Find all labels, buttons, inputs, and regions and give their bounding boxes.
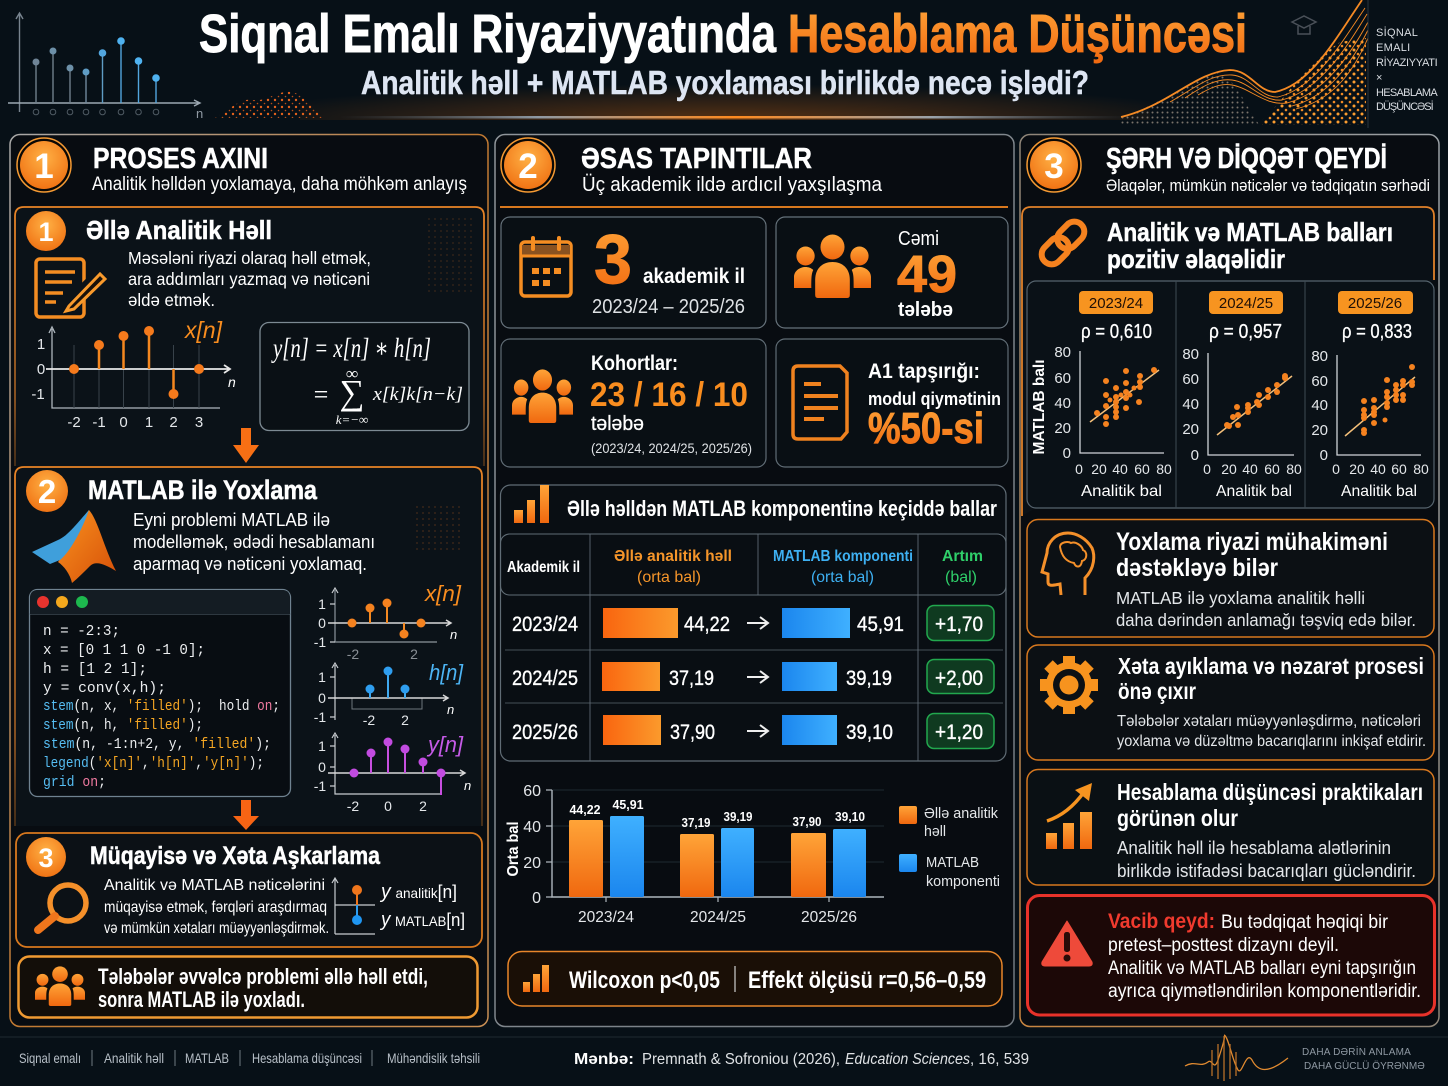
card heading: Yoxlama riyazi mühakiməni xyxy=(1116,528,1388,556)
chart: small h[n]: -2 xyxy=(363,712,375,728)
step 3 badge: 3 xyxy=(38,843,54,873)
header side label: SİQNAL xyxy=(1376,26,1418,39)
chart: small h[n]: -1 xyxy=(314,709,326,725)
chart: small y[n]: y[n] xyxy=(426,732,464,757)
scatter chart 2025/26: 80 xyxy=(1413,461,1429,477)
chart: x[n] stem plot xyxy=(31,317,236,431)
chart: small y[n]: 0 xyxy=(318,759,326,775)
cohort text: (2023/24, 2024/25, 2025/26) xyxy=(591,440,752,456)
chart: small y[n]: 1 xyxy=(318,738,326,754)
scatter chart 2023/24: 40 xyxy=(1054,395,1071,412)
step 2: MATLAB verification xyxy=(15,467,482,826)
chart: small y[n]: -1 xyxy=(314,778,326,794)
stat text: tələbə xyxy=(898,299,953,321)
stat text: Cəmi xyxy=(898,228,939,250)
code window xyxy=(30,590,290,796)
info card: debugging xyxy=(1027,645,1434,760)
scatter chart 2023/24 xyxy=(1054,291,1172,500)
panel 1 heading xyxy=(92,143,467,195)
formula box: convolution xyxy=(260,322,469,430)
footer tags: Analitik həll xyxy=(104,1050,164,1066)
statistics banner xyxy=(508,952,1002,1006)
formula box: convolution: ∑ xyxy=(340,373,364,412)
card body xyxy=(1116,588,1416,630)
chart: x[n] stem plot: 2 xyxy=(169,414,178,431)
chart: small y[n] xyxy=(314,732,471,814)
panel 1 number badge: 1 xyxy=(34,147,54,186)
callout text: Tələbələr əvvəlcə problemi əllə həll etdi, xyxy=(98,964,428,989)
icon: brain in head xyxy=(1042,533,1094,595)
formula box: convolution: y[n] = x[n] ∗ h[n] xyxy=(271,333,431,363)
scatter chart 2023/24: 0 xyxy=(1075,461,1083,477)
decorative stem plot xyxy=(8,13,203,121)
table row 2025/26 xyxy=(512,714,994,748)
scatter chart 2023/24: 80 xyxy=(1054,344,1071,361)
bar chart: mean scores: 2025/26 xyxy=(801,909,857,926)
decorative wave xyxy=(1121,0,1368,125)
table row 2025/26: 2025/26 xyxy=(512,721,578,744)
header side label xyxy=(1376,26,1438,113)
panel 2 heading xyxy=(581,143,883,196)
card heading xyxy=(1117,779,1423,831)
table row 2023/24 xyxy=(512,606,994,640)
panel 3 heading: ŞƏRH VƏ DİQQƏT QEYDİ xyxy=(1106,143,1387,175)
arrow: step 1 to step 2 xyxy=(233,428,259,463)
scatter chart 2023/24: 0 xyxy=(1063,445,1071,462)
panel 2 number badge: 2 xyxy=(518,147,538,186)
bar chart: mean scores: 0 xyxy=(532,890,541,907)
step 3 heading: Müqayisə və Xəta Aşkarlama xyxy=(90,842,381,870)
step 3: compare and detect errors xyxy=(16,833,482,947)
chart: small y[n]: -2 xyxy=(347,798,359,814)
scatter chart 2025/26: 40 xyxy=(1370,461,1386,477)
chart: small x[n]: 2 xyxy=(410,646,418,662)
table grid xyxy=(500,534,1006,761)
stat text: 49 xyxy=(897,246,957,304)
chart: x[n] stem plot: 1 xyxy=(145,414,153,431)
cohort text: tələbə xyxy=(591,413,644,435)
scatter chart 2024/25: 80 xyxy=(1182,346,1199,363)
scatter plots frame xyxy=(1027,281,1434,508)
table row 2025/26: +1,20 xyxy=(935,721,983,744)
statistics text: Wilcoxon p<0,05 xyxy=(569,967,720,994)
card heading: dəstəkləyə bilər xyxy=(1116,554,1278,582)
bar chart: mean scores: 45,91 xyxy=(612,797,644,812)
bar chart: mean scores: 39,19 xyxy=(724,809,752,824)
scatter chart 2023/24: Analitik bal xyxy=(1081,483,1162,500)
bar chart: mean scores: 60 xyxy=(523,783,541,800)
card body: Tələbələr xətaları müəyyənləşdirmə, nəticələri xyxy=(1117,713,1421,730)
bar chart: mean scores: 2023/24 xyxy=(578,909,634,926)
scatter chart 2025/26: ρ = 0,833 xyxy=(1342,321,1412,343)
chart legend xyxy=(899,805,1000,890)
source citation: , 16, 539 xyxy=(970,1051,1029,1068)
code window: x = [0 1 1 0 -1 0]; xyxy=(43,642,205,659)
callout text: sonra MATLAB ilə yoxladı. xyxy=(98,987,305,1012)
table header: Artım xyxy=(942,548,983,565)
card body: Analitik həll ilə hesablama alətlərinin xyxy=(1117,838,1391,858)
stat card: academic years xyxy=(501,217,766,328)
scatter chart 2023/24: 60 xyxy=(1054,370,1071,387)
stat text xyxy=(897,228,957,321)
bar chart: mean scores: 37,90 xyxy=(792,814,822,829)
chart: small h[n]: h[n] xyxy=(429,660,464,685)
icon: bars xyxy=(514,485,549,523)
chart: small x[n]: 0 xyxy=(318,615,326,631)
section heading: Analitik və MATLAB balları xyxy=(1107,217,1393,247)
A1 text: A1 tapşırığı: xyxy=(868,360,980,383)
icon: MATLAB membrane xyxy=(32,510,116,583)
icon: warning triangle xyxy=(1042,921,1092,966)
table row 2023/24: 44,22 xyxy=(684,613,730,636)
stat value: 3: 3 xyxy=(594,220,632,298)
step 1: manual solution xyxy=(15,207,484,466)
table row 2024/25: 37,19 xyxy=(669,667,714,690)
statistics text: Effekt ölçüsü r=0,56–0,59 xyxy=(748,967,986,994)
callout: students workflow xyxy=(18,956,478,1018)
table header: (bal) xyxy=(945,569,977,586)
stat card: A1 task xyxy=(776,339,1008,467)
step 1 heading: Əllə Analitik Həll xyxy=(86,215,272,245)
table row 2024/25: 2024/25 xyxy=(512,667,578,690)
chart: x[n] stem plot: n xyxy=(228,374,236,390)
scatter chart 2024/25: Analitik bal xyxy=(1216,483,1292,500)
stat range: 2023/24 – 2025/26 xyxy=(592,296,745,318)
info card: computational thinking xyxy=(1027,770,1434,885)
scatter chart 2025/26: 80 xyxy=(1311,348,1328,365)
chart: small y[n]: 2 xyxy=(419,798,427,814)
chart: x[n] stem plot: -2 xyxy=(67,414,81,431)
bar chart: mean scores: 2024/25 xyxy=(690,909,746,926)
footer tags xyxy=(19,1050,480,1066)
chart: x[n] stem plot: 0 xyxy=(37,361,45,378)
card body: daha dərindən anlamağı təşviq edə bilər. xyxy=(1116,610,1416,630)
card body: MATLAB ilə yoxlama analitik həlli xyxy=(1116,588,1365,608)
stat card: cohorts xyxy=(501,339,766,467)
icon: people xyxy=(35,966,85,1006)
formula box: convolution: k=−∞ xyxy=(336,412,368,427)
scatter chart 2024/25: 20 xyxy=(1182,421,1199,438)
table row 2025/26: 39,10 xyxy=(846,721,893,744)
decorative stem plot: n xyxy=(196,106,203,121)
scatter chart 2023/24: ρ = 0,610 xyxy=(1081,321,1152,343)
chart: x[n] stem plot: x[n] xyxy=(184,317,223,343)
footer tagline: DAHA GÜCLÜ ÖYRƏNMƏ xyxy=(1304,1060,1426,1072)
scatter chart 2023/24: 2023/24 xyxy=(1089,295,1143,312)
chart legend: həll xyxy=(924,823,946,840)
panel 2 heading: ƏSAS TAPINTILAR xyxy=(581,143,812,175)
scatter chart 2024/25: 2024/25 xyxy=(1219,295,1273,312)
chart: x[n] stem plot: 1 xyxy=(37,336,45,353)
scatter chart 2023/24: 80 xyxy=(1156,461,1172,477)
card body xyxy=(1117,838,1416,881)
scatter chart 2025/26: 0 xyxy=(1320,447,1328,464)
bar chart: mean scores: 20 xyxy=(523,855,541,872)
icon: document xyxy=(793,366,847,439)
section heading: pozitiv əlaqəlidir xyxy=(1107,244,1285,274)
step 3 description: Analitik və MATLAB nəticələrini xyxy=(104,877,325,894)
scatter chart 2024/25: 60 xyxy=(1264,461,1280,477)
bar chart: mean scores: 44,22 xyxy=(570,802,600,817)
correlation section xyxy=(1022,207,1434,516)
header side label: HESABLAMA xyxy=(1376,87,1438,99)
panel 2 number badge xyxy=(501,138,555,192)
table header: (orta bal) xyxy=(637,569,701,586)
icon: people xyxy=(794,234,871,298)
footer tagline xyxy=(1302,1045,1426,1072)
table header: Əllə analitik həll xyxy=(614,548,732,565)
scatter chart 2025/26: 20 xyxy=(1311,422,1328,439)
icon: document with pencil xyxy=(36,259,105,317)
scatter chart 2025/26: 60 xyxy=(1311,373,1328,390)
bar chart: mean scores: Orta bal xyxy=(505,822,522,876)
header side label: EMALI xyxy=(1376,42,1411,54)
icon: people xyxy=(512,369,573,423)
formula box: convolution: ∞ xyxy=(346,364,358,383)
formula box: convolution: = xyxy=(312,380,330,409)
decorative dot cloud xyxy=(215,92,326,118)
chart: x[n] stem plot: -1 xyxy=(31,386,45,403)
table header xyxy=(507,548,983,586)
scatter chart 2025/26: Analitik bal xyxy=(1341,483,1417,500)
scatter chart 2024/25: 40 xyxy=(1182,396,1199,413)
scatter chart 2024/25: 0 xyxy=(1203,461,1211,477)
code window: grid on; xyxy=(43,774,106,791)
chart: small h[n]: 2 xyxy=(401,712,409,728)
bar chart: mean scores: 40 xyxy=(523,819,541,836)
panel 3 number badge: 3 xyxy=(1044,147,1064,186)
chart: small x[n] xyxy=(314,581,462,662)
warning text: pretest–posttest dizaynı deyil. xyxy=(1108,935,1339,956)
icon: bars xyxy=(523,965,549,992)
warning text xyxy=(1108,910,1421,1002)
chart: x[n] stem plot: 0 xyxy=(119,414,128,431)
table row 2025/26: 37,90 xyxy=(670,721,715,744)
card heading xyxy=(1118,653,1424,704)
step 2 badge xyxy=(26,470,68,512)
chart: small h[n] xyxy=(314,660,464,728)
warning card xyxy=(1028,896,1434,1015)
scatter chart 2024/25: ρ = 0,957 xyxy=(1209,321,1282,343)
scatter chart 2025/26 xyxy=(1311,291,1429,500)
icon: chain link xyxy=(1038,218,1088,268)
scatter chart 2024/25: 40 xyxy=(1242,461,1258,477)
chart: small y[n]: n xyxy=(464,778,471,793)
step 1 description: Məsələni riyazi olaraq həll etmək, xyxy=(128,248,371,268)
code window: y = conv(x,h); xyxy=(43,680,166,697)
chart: comparison stem and legend: y analitik[n] xyxy=(379,881,457,903)
panel 1 heading: PROSES AXINI xyxy=(93,143,268,175)
icon: graduation cap xyxy=(1292,16,1316,34)
A1 text: %50-si xyxy=(868,404,984,453)
score table xyxy=(500,485,1006,761)
code window: stem(n, -1:n+2, y, 'filled'); xyxy=(43,736,271,753)
warning text: Bu tədqiqat həqiqi bir xyxy=(1221,912,1389,933)
step 1 badge: 1 xyxy=(38,217,54,247)
scatter plots frame: MATLAB balı xyxy=(1031,360,1048,454)
header xyxy=(8,0,1438,128)
panel: process flow xyxy=(10,134,488,1026)
footer waveform icon xyxy=(1185,1035,1288,1081)
code window: stem(n, h, 'filled'); xyxy=(43,717,203,734)
footer tags: Siqnal emalı xyxy=(19,1050,81,1066)
step 3 description xyxy=(104,877,329,937)
source citation: Premnath & Sofroniou (2026), xyxy=(642,1051,840,1068)
header divider glow line xyxy=(340,116,1130,118)
footer tags: Hesablama düşüncəsi xyxy=(252,1050,362,1066)
arrow: step 2 to step 3 xyxy=(233,800,259,830)
code window: stem(n, x, 'filled'); xyxy=(43,698,203,715)
header side label: DÜŞÜNCƏSİ xyxy=(1376,100,1434,113)
panel 1 number badge xyxy=(17,138,71,192)
footer tags: MATLAB xyxy=(185,1050,229,1066)
chart: x[n] stem plot: 3 xyxy=(195,414,203,431)
chart: small h[n]: 0 xyxy=(318,690,326,706)
panel 1 heading: Analitik həlldən yoxlamaya, daha möhkəm anlayış xyxy=(92,174,467,195)
step 3 description: müqayisə etmək, fərqləri araşdırmaq xyxy=(104,899,327,916)
scatter chart 2024/25: 60 xyxy=(1182,371,1199,388)
subtitle: Analitik həll + MATLAB yoxlaması birlikdə necə işlədi? xyxy=(361,64,1089,101)
table header: (orta bal) xyxy=(811,569,874,586)
title: Hesablama Düşüncəsi xyxy=(788,4,1247,64)
scatter chart 2025/26: 0 xyxy=(1332,461,1340,477)
scatter chart 2025/26: 2025/26 xyxy=(1348,295,1402,312)
step 2 badge: 2 xyxy=(38,473,56,510)
step 1 description: əldə etmək. xyxy=(128,290,215,310)
scatter chart 2023/24: 20 xyxy=(1091,461,1107,477)
cohort text xyxy=(590,352,752,456)
panel 3 heading xyxy=(1106,143,1430,195)
chart: small x[n]: n xyxy=(450,627,457,642)
step 3 badge xyxy=(26,837,66,877)
chart: small x[n]: x[n] xyxy=(424,581,462,606)
panel 3 number badge xyxy=(1027,138,1081,192)
chart legend: Əllə analitik xyxy=(924,805,998,822)
section heading xyxy=(1107,217,1393,274)
source citation: Education Sciences xyxy=(845,1051,970,1068)
chart: small y[n]: 0 xyxy=(384,798,392,814)
icon: growth chart xyxy=(1046,783,1092,849)
code window: hold on; xyxy=(219,698,280,715)
source citation: Mənbə: xyxy=(574,1051,634,1068)
chart legend: MATLAB xyxy=(926,854,979,871)
scatter chart 2024/25: 20 xyxy=(1221,461,1237,477)
panel 2 heading: Üç akademik ildə ardıcıl yaxşılaşma xyxy=(582,174,883,196)
footer tagline: DAHA DƏRİN ANLAMA xyxy=(1302,1045,1412,1058)
scatter chart 2023/24: 40 xyxy=(1112,461,1128,477)
cohort text: Kohortlar: xyxy=(591,352,678,375)
warning text: Analitik və MATLAB balları eyni tapşırığın xyxy=(1108,958,1416,979)
table row 2023/24: 45,91 xyxy=(857,613,904,636)
footer tags: Mühəndislik təhsili xyxy=(387,1050,480,1066)
scatter chart 2024/25 xyxy=(1182,291,1302,500)
card heading: görünən olur xyxy=(1117,805,1238,831)
step 2 description: modelləmək, ədədi hesablamanı xyxy=(133,532,375,552)
info card: reasoning xyxy=(1027,520,1434,637)
footer xyxy=(0,1035,1448,1081)
chart: small x[n]: -1 xyxy=(314,634,326,650)
bar chart: mean scores xyxy=(505,783,1000,926)
step 1 description xyxy=(128,248,371,310)
chart legend: komponenti xyxy=(926,873,1000,890)
chart: small h[n]: 1 xyxy=(318,669,326,685)
table row 2024/25 xyxy=(512,660,994,694)
bar chart: mean scores: 37,19 xyxy=(682,815,710,830)
panel: interpretation and note xyxy=(1020,134,1439,1026)
chart: x[n] stem plot: -1 xyxy=(92,414,106,431)
cohort text: 23 / 16 / 10 xyxy=(590,376,748,414)
icon: calendar xyxy=(521,238,571,296)
step 2 description: Eyni problemi MATLAB ilə xyxy=(133,510,330,530)
source citation xyxy=(574,1051,1029,1068)
code window: legend('x[n]','h[n]','y[n]'); xyxy=(43,755,264,772)
step 1 description: ara addımları yazmaq və nəticəni xyxy=(128,269,370,289)
stat card: total students xyxy=(776,217,1008,328)
step 3 description: və mümkün xətaları müəyyənləşdirmək. xyxy=(104,920,329,937)
table header: Akademik il xyxy=(507,559,580,576)
card heading xyxy=(1116,528,1388,582)
icon: gear xyxy=(1040,656,1098,714)
header side label: × xyxy=(1376,72,1383,84)
scatter chart 2023/24: 60 xyxy=(1134,461,1150,477)
chart: small h[n]: n xyxy=(447,702,454,717)
chart: small x[n]: -2 xyxy=(347,646,359,662)
scatter chart 2025/26: 60 xyxy=(1391,461,1407,477)
card heading: önə çıxır xyxy=(1118,678,1196,704)
stat label: academic years: akademik il xyxy=(643,265,745,288)
callout text xyxy=(98,964,428,1012)
code window: n = -2:3; xyxy=(43,623,120,640)
chart: comparison stem and legend: y MATLAB[n] xyxy=(379,909,465,931)
scatter chart 2024/25: 0 xyxy=(1191,447,1199,464)
title: Siqnal Emalı Riyaziyyatında xyxy=(199,4,777,64)
warning text: Vacib qeyd: xyxy=(1108,910,1215,933)
header side label: RİYAZIYYATI xyxy=(1376,56,1438,69)
formula box: convolution: x[k]k[n−k] xyxy=(372,384,463,405)
card body xyxy=(1117,713,1426,750)
table title: Əllə həlldən MATLAB komponentinə keçiddə ballar xyxy=(567,496,997,521)
table header: MATLAB komponenti xyxy=(773,548,913,565)
title xyxy=(199,4,1247,64)
card body: yoxlama və düzəltmə bacarıqlarını inkişaf etdirir. xyxy=(1117,733,1426,750)
chart: comparison stem and legend xyxy=(332,878,465,934)
chart: small x[n]: 1 xyxy=(318,596,326,612)
card body: birlikdə istifadəsi bacarıqları gücləndirir. xyxy=(1117,861,1416,881)
code window: h = [1 2 1]; xyxy=(43,661,147,678)
statistics text xyxy=(569,966,986,994)
scatter chart 2024/25: 80 xyxy=(1286,461,1302,477)
scatter chart 2025/26: 40 xyxy=(1311,397,1328,414)
table row 2023/24: 2023/24 xyxy=(512,613,578,636)
scatter chart 2023/24: 20 xyxy=(1054,420,1071,437)
step 2 description: aparmaq və nəticəni yoxlamaq. xyxy=(133,554,367,574)
warning text: ayrıca qiymətləndirilən komponentləridir. xyxy=(1108,981,1421,1002)
table row 2024/25: +2,00 xyxy=(935,667,983,690)
bar chart: mean scores: 39,10 xyxy=(835,809,865,824)
A1 text xyxy=(868,360,1001,453)
step 1 badge xyxy=(26,211,66,251)
table row 2023/24: +1,70 xyxy=(935,613,983,636)
scatter chart 2025/26: 20 xyxy=(1349,461,1365,477)
table row 2024/25: 39,19 xyxy=(846,667,892,690)
step 2 description xyxy=(133,510,375,574)
A1 text: modul qiymətinin xyxy=(868,388,1001,409)
icon: magnifier xyxy=(38,885,86,930)
panel: key findings xyxy=(495,134,1014,1026)
step 2 heading: MATLAB ilə Yoxlama xyxy=(88,475,318,505)
